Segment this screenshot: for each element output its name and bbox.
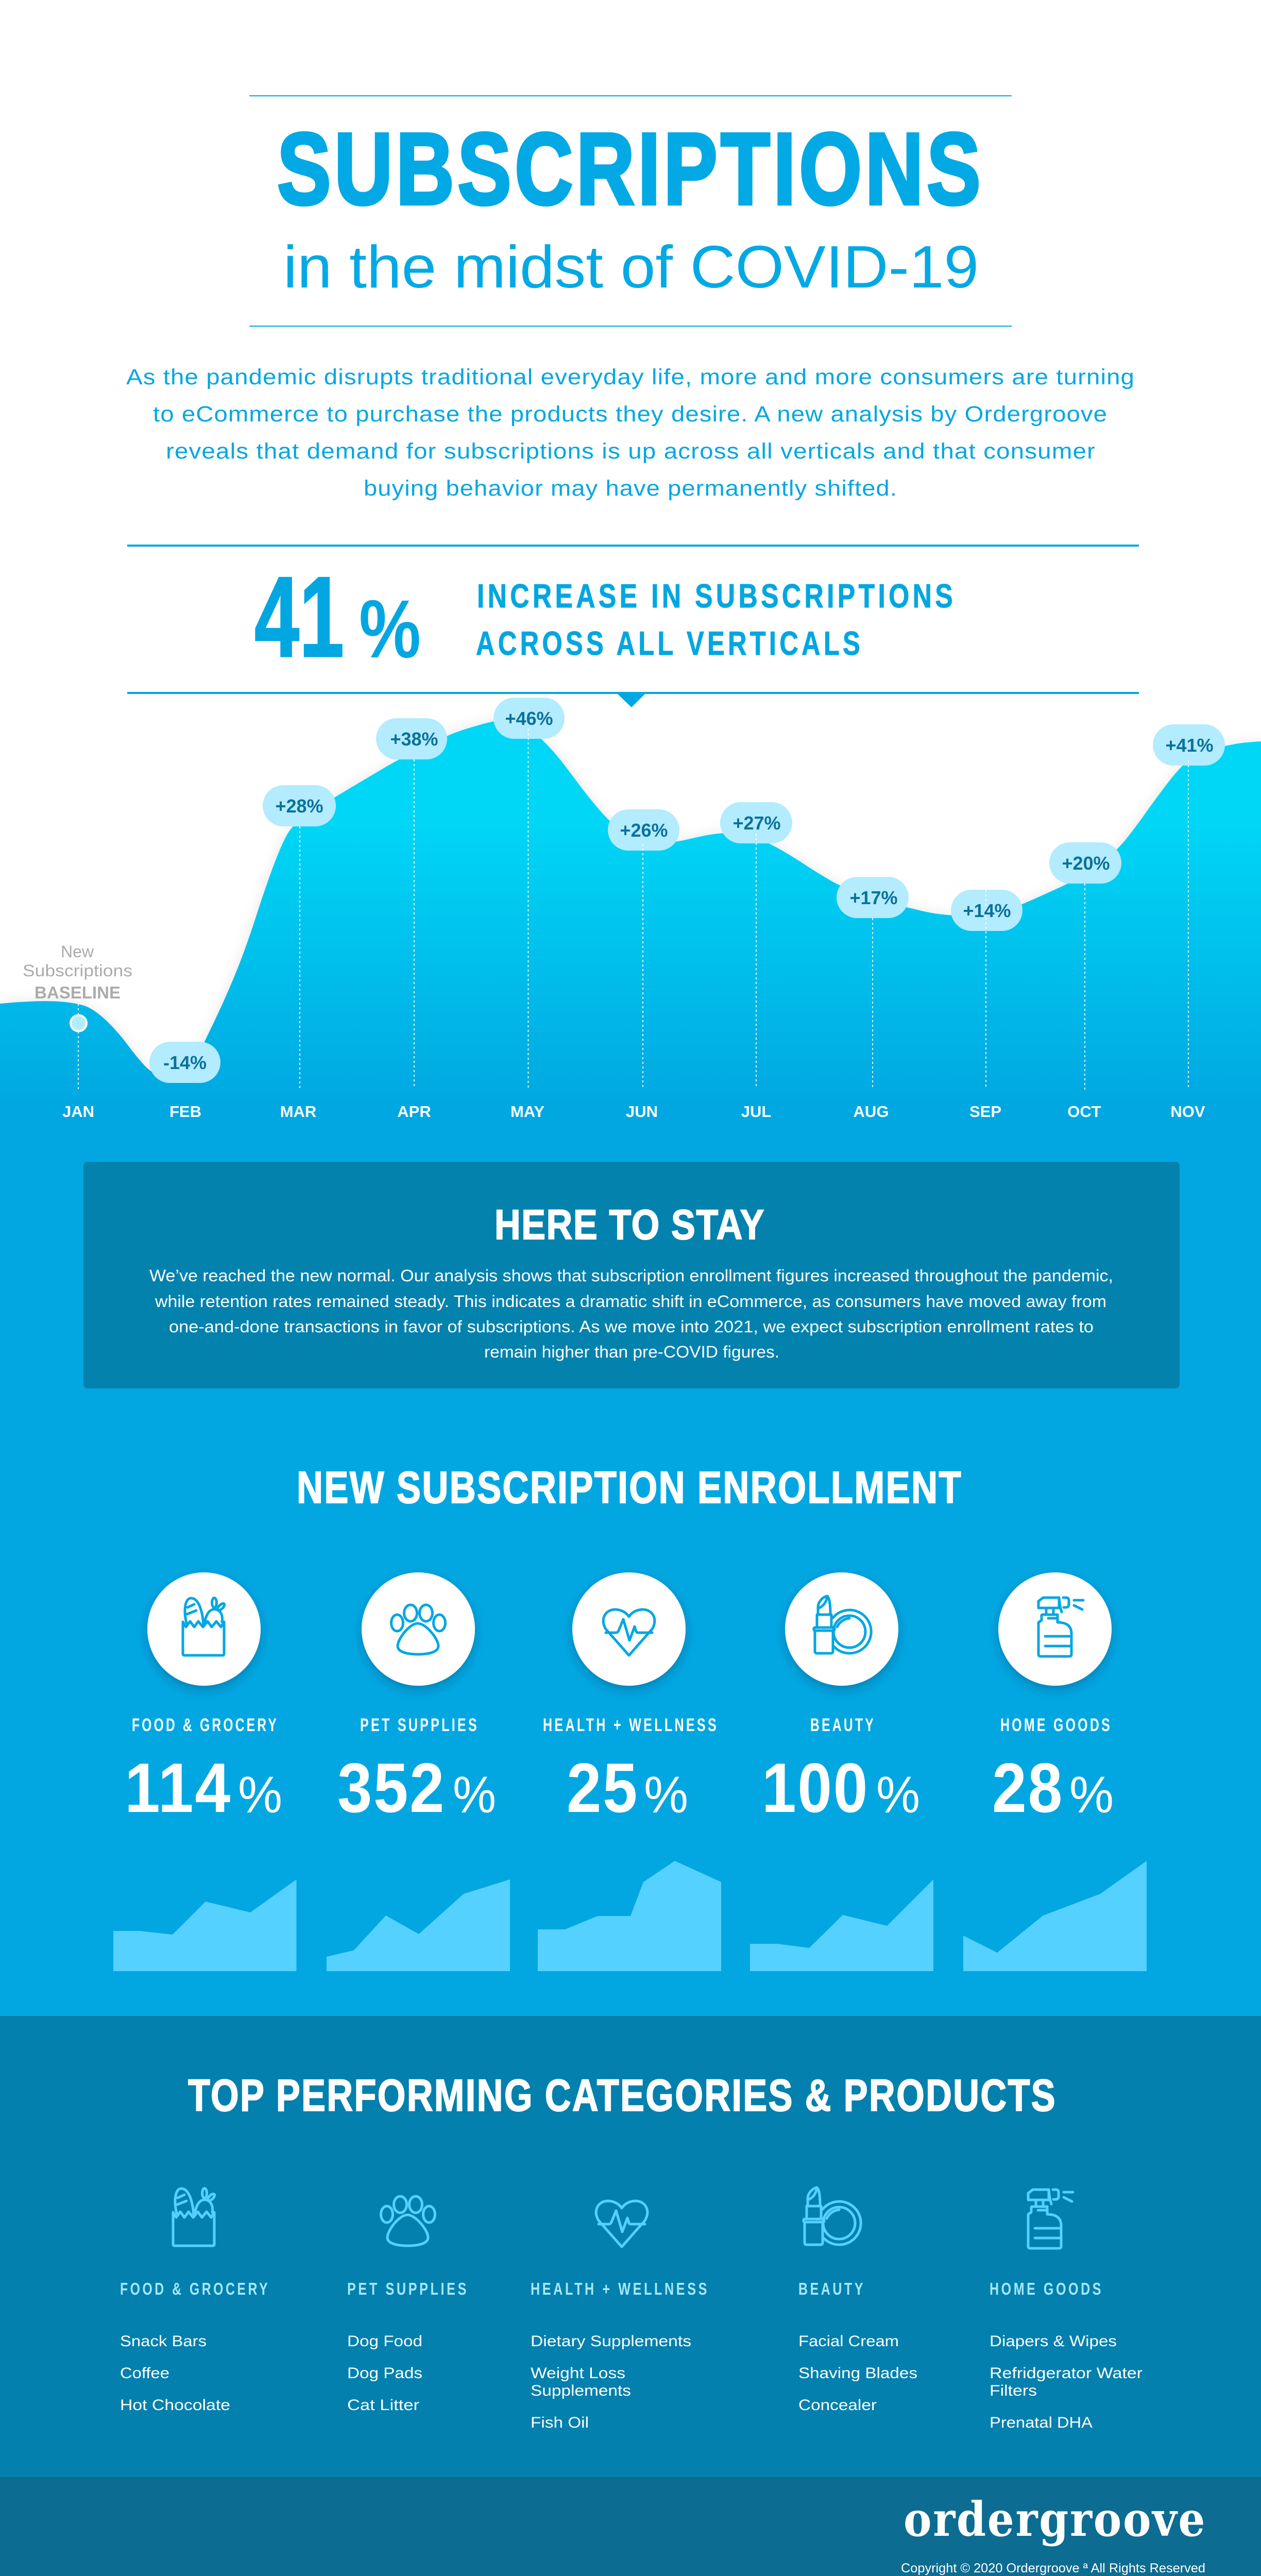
enrollment column: beauty: % [876, 1766, 920, 1824]
pills: monthly value backgrounds [149, 698, 1225, 1083]
category: food and grocery: FOOD & GROCERY [120, 2279, 270, 2298]
baseline marker: BASELINE [35, 983, 121, 1002]
pill labels: monthly values: +46% [505, 708, 553, 729]
category: health and wellness: Dietary Supplements [531, 2333, 691, 2350]
month labels: FEB [169, 1103, 201, 1121]
chart: monthly subscription increase [0, 698, 1261, 2016]
baseline marker [23, 942, 132, 1031]
category: health and wellness [531, 2201, 709, 2431]
category: home goods: Prenatal DHA [990, 2414, 1093, 2431]
copyright: Copyright © 2020 Ordergroove ª All Rights Reserved [901, 2561, 1205, 2575]
enrollment column: pet supplies [327, 1572, 510, 1971]
callout: 41% increase [127, 545, 1139, 707]
category: health and wellness: HEALTH + WELLNESS [531, 2279, 709, 2298]
enrollment column: beauty: BEAUTY [810, 1715, 876, 1735]
chart area curve [0, 719, 1261, 1154]
enrollment column: health and wellness: HEALTH + WELLNESS [543, 1715, 719, 1735]
pill labels: monthly values: +38% [390, 728, 438, 750]
section background: light blue [0, 1123, 1261, 2016]
enrollment column: pet supplies: % [453, 1766, 496, 1824]
subtitle: in the midst of COVID-19 [283, 233, 979, 300]
pill labels: monthly values [163, 708, 1214, 1073]
callout: 41% increase: INCREASE IN SUBSCRIPTIONS [477, 577, 956, 615]
category: home goods: Diapers & Wipes [990, 2333, 1117, 2350]
category: food and grocery: Snack Bars [120, 2333, 207, 2350]
category: beauty: Shaving Blades [798, 2365, 917, 2382]
intro text block: to eCommerce to purchase the products they desire. A new analysis by Ordergroove [153, 402, 1107, 427]
enrollment column: beauty: 100 [762, 1749, 869, 1827]
pill labels: monthly values: -14% [163, 1052, 207, 1073]
enrollment column: health and wellness [538, 1572, 721, 1971]
enrollment column: pet supplies: PET SUPPLIES [360, 1715, 479, 1735]
enrollment column: home goods: 28 [992, 1749, 1064, 1827]
category: home goods [990, 2190, 1143, 2431]
panel: here to stay [83, 1162, 1180, 1388]
section heading: TOP PERFORMING CATEGORIES & PRODUCTS [188, 2071, 1056, 2121]
enrollment column: health and wellness: 25 [567, 1749, 639, 1827]
category: beauty: Concealer [798, 2397, 877, 2414]
category: pet supplies: Dog Pads [347, 2365, 422, 2382]
title: SUBSCRIPTIONS [277, 112, 984, 226]
month labels: AUG [854, 1103, 889, 1121]
pill labels: monthly values: +20% [1062, 853, 1110, 874]
panel body text: remain higher than pre-COVID figures. [484, 1343, 779, 1361]
enrollment column: food and grocery: FOOD & GROCERY [132, 1715, 279, 1735]
logo: ordergroove: ordergroove [904, 2492, 1206, 2547]
category: home goods: Filters [990, 2382, 1037, 2399]
callout: 41% increase: % [359, 583, 421, 675]
pill labels: monthly values: +26% [620, 820, 668, 841]
panel body text: one-and-done transactions in favor of subscriptions. As we move into 2021, we expect subscription enrollment rates to [169, 1317, 1094, 1336]
intro text block: buying behavior may have permanently shifted. [364, 476, 897, 501]
baseline marker: New [61, 942, 94, 961]
enrollment column: food and grocery [113, 1572, 297, 1971]
category: health and wellness: Weight Loss [531, 2365, 625, 2382]
category: pet supplies: PET SUPPLIES [347, 2279, 469, 2298]
category: beauty: BEAUTY [798, 2279, 865, 2298]
month labels: JUL [741, 1103, 771, 1121]
enrollment column: home goods: HOME GOODS [1000, 1715, 1112, 1735]
category: beauty [798, 2188, 917, 2414]
intro text block [126, 365, 1135, 501]
enrollment column: food and grocery: 114 [125, 1749, 232, 1827]
category: food and grocery: Coffee [120, 2365, 169, 2382]
callout: 41% increase: 41 [254, 553, 344, 681]
pill labels: monthly values: +41% [1165, 735, 1214, 756]
baseline marker: Subscriptions [23, 961, 132, 980]
category: beauty: Facial Cream [798, 2333, 899, 2350]
month labels: MAY [510, 1103, 544, 1121]
intro text block: As the pandemic disrupts traditional everyday life, more and more consumers are turning [126, 365, 1135, 389]
enrollment column: beauty [750, 1572, 933, 1971]
pill labels: monthly values: +28% [275, 795, 323, 817]
header block [249, 96, 1012, 326]
category: pet supplies [347, 2196, 469, 2414]
enrollment column: home goods [963, 1572, 1147, 1971]
section: top performing categories [0, 2016, 1261, 2477]
footer [0, 2477, 1261, 2576]
category: home goods: HOME GOODS [990, 2279, 1103, 2298]
month labels: JUN [626, 1103, 658, 1121]
panel body text [149, 1266, 1113, 1361]
category: pet supplies: Dog Food [347, 2333, 422, 2350]
heading: new subscription enrollment: NEW SUBSCRIPTION ENROLLMENT [297, 1463, 962, 1513]
panel body text: while retention rates remained steady. This indicates a dramatic shift in eCommerce, as consumers have moved away from [155, 1292, 1106, 1311]
category: food and grocery: Hot Chocolate [120, 2397, 230, 2414]
pill labels: monthly values: +14% [963, 900, 1011, 921]
enrollment column: home goods: % [1069, 1766, 1114, 1824]
month labels: APR [397, 1103, 431, 1121]
enrollment column: food and grocery: % [238, 1766, 282, 1824]
month labels: JAN [62, 1103, 94, 1121]
pill labels: monthly values: +27% [732, 812, 781, 834]
month labels: SEP [969, 1103, 1001, 1121]
month labels: NOV [1170, 1103, 1205, 1121]
panel body text: We’ve reached the new normal. Our analysis shows that subscription enrollment figures increased throughout the pandemic, [149, 1266, 1113, 1285]
enrollment column: pet supplies: 352 [337, 1749, 446, 1827]
intro text block: reveals that demand for subscriptions is up across all verticals and that consumer [166, 439, 1096, 464]
month labels [62, 1103, 1205, 1121]
pill labels: monthly values: +17% [849, 887, 898, 908]
panel heading: HERE TO STAY [495, 1201, 765, 1248]
category: health and wellness: Supplements [531, 2382, 631, 2399]
month labels: MAR [280, 1103, 316, 1121]
category: health and wellness: Fish Oil [531, 2414, 589, 2431]
callout: 41% increase: ACROSS ALL VERTICALS [476, 624, 863, 662]
category: pet supplies: Cat Litter [347, 2397, 419, 2414]
category: home goods: Refridgerator Water [990, 2365, 1143, 2382]
enrollment column: health and wellness: % [644, 1766, 688, 1824]
category: food and grocery [120, 2189, 270, 2414]
month labels: OCT [1067, 1103, 1101, 1121]
